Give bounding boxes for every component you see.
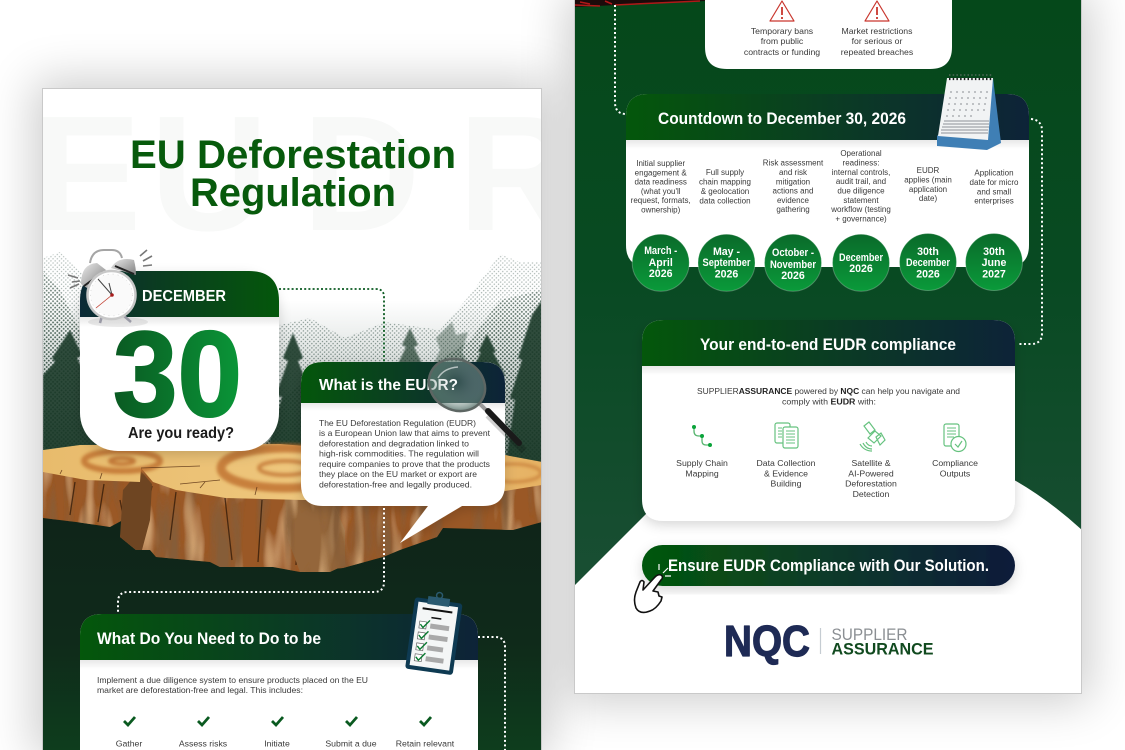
panel intro text <box>98 677 368 694</box>
timeline date circles: 2026 <box>916 268 940 280</box>
penalty text: restrictions: repeated breaches <box>841 47 914 57</box>
timeline descriptions: audit trail, and <box>836 177 886 186</box>
timeline descriptions: Operational <box>840 149 882 158</box>
checklist items: Gather <box>116 738 142 748</box>
main title: EU Deforestation <box>130 133 456 177</box>
icon: supply chain route <box>692 425 712 447</box>
main title: Regulation <box>190 171 396 215</box>
ghost lettering EUDR: D <box>302 82 420 265</box>
panel body text <box>319 418 491 490</box>
timeline descriptions: mitigation <box>776 178 810 186</box>
service labels: Detection <box>853 489 890 499</box>
panel: countdown <box>626 94 1029 291</box>
logo: NQC supplier assurance: SUPPLIER <box>832 625 908 644</box>
timeline descriptions: applies (main <box>904 176 952 184</box>
icon: documents <box>775 423 798 448</box>
timeline date circles: April <box>649 257 673 269</box>
big date number: 30 <box>113 306 242 442</box>
service labels: Supply Chain <box>676 458 728 468</box>
icon: desk calendar <box>937 75 1001 150</box>
checklist items <box>116 717 455 748</box>
timeline date circles: 2027 <box>982 268 1006 280</box>
service labels: AI-Powered <box>848 468 894 478</box>
timeline descriptions: data collection <box>699 196 751 206</box>
calendar card <box>80 271 279 451</box>
timeline date circles: June <box>982 257 1006 269</box>
timeline descriptions: (what you'll <box>641 187 681 196</box>
timeline date circles <box>632 234 1022 291</box>
service labels: Compliance <box>932 458 978 468</box>
panel header <box>642 320 1015 366</box>
checklist items: Submit a due <box>325 738 377 748</box>
dotted connector: requirements onward <box>478 637 505 750</box>
icon: warning triangle <box>865 1 889 21</box>
icon: pointing hand <box>634 564 671 612</box>
timeline date circles: November <box>770 259 816 271</box>
timeline date circles: October - <box>772 247 814 259</box>
icon: magnifying glass <box>428 358 526 453</box>
green background <box>575 0 1082 600</box>
panel body text: The EU Deforestation Regulation (EUDR) <box>319 418 476 428</box>
icon: warning triangle <box>770 1 794 21</box>
icon: satellite <box>860 422 885 451</box>
service labels: Data Collection <box>757 458 816 468</box>
left page <box>32 82 576 750</box>
timeline descriptions: + governance) <box>835 214 887 224</box>
timeline descriptions: evidence <box>777 196 810 205</box>
penalty text: bans <box>744 26 820 57</box>
panel: what is the EUDR <box>301 362 505 543</box>
dotted connector: into countdown <box>615 5 626 114</box>
tree stump <box>43 444 542 572</box>
service labels: Building <box>771 478 802 488</box>
timeline descriptions: Application <box>974 168 1014 178</box>
timeline date circles: May - <box>713 246 741 258</box>
dotted connector: calendar to card <box>279 289 384 362</box>
checklist items: Assess risks <box>179 738 228 748</box>
timeline descriptions: Risk assessment <box>763 158 824 168</box>
panel heading: What Do You Need to Do to be <box>97 630 321 648</box>
timeline date circles: 30th <box>983 246 1005 258</box>
panel: end-to-end compliance <box>642 320 1015 521</box>
penalty text: bans: Temporary bans <box>751 26 814 36</box>
timeline descriptions: workflow (testing <box>830 205 891 214</box>
timeline date circles: 2026 <box>849 263 873 275</box>
panel header <box>80 614 478 660</box>
dotted connector: card to requirements <box>118 508 384 614</box>
month label: DECEMBER <box>142 288 226 305</box>
timeline descriptions: request, formats, <box>631 196 691 205</box>
timeline descriptions: gathering <box>776 205 810 214</box>
call to action button <box>642 545 1015 586</box>
timeline descriptions: date for micro <box>970 178 1019 187</box>
timeline descriptions: readiness: <box>843 158 879 168</box>
icon: clipboard <box>405 589 464 675</box>
timeline descriptions: Full supply <box>706 168 744 177</box>
panel body text: deforestation-free and legally produced. <box>319 480 472 490</box>
service labels: Outputs <box>940 468 971 478</box>
ghost lettering EUDR: R <box>458 82 576 265</box>
dotted connector: countdown to compliance <box>1017 119 1042 344</box>
panel header <box>626 94 1029 140</box>
penalty text: restrictions <box>841 26 914 57</box>
icon: alarm clock <box>68 250 152 327</box>
panel: what do you need to do <box>80 614 478 750</box>
logo: NQC supplier assurance: NQC <box>724 617 810 666</box>
timeline descriptions: application <box>909 185 947 194</box>
halftone forest background <box>43 252 541 462</box>
checklist items: Retain relevant <box>396 738 455 748</box>
timeline descriptions: EUDR <box>917 166 940 175</box>
timeline date circles: 2026 <box>715 268 738 280</box>
ghost lettering EUDR <box>32 82 576 265</box>
timeline descriptions: actions and <box>773 186 813 196</box>
timeline descriptions: ownership) <box>641 206 681 214</box>
calendar header <box>80 271 279 317</box>
timeline date circles: 30th <box>917 246 939 258</box>
icon: compliance document <box>944 424 966 452</box>
timeline descriptions: chain mapping <box>699 178 751 186</box>
logo: NQC supplier assurance <box>724 617 934 666</box>
timeline descriptions: enterprises <box>974 196 1014 206</box>
checklist items: Initiate <box>264 738 290 748</box>
timeline descriptions: Initial supplier <box>636 159 685 168</box>
timeline descriptions: statement <box>843 196 879 205</box>
intro text: comply with EUDR with: <box>782 396 876 406</box>
panel intro text: Implement a due diligence system to ensure products placed on the EU <box>97 675 368 685</box>
panel body text: is a European Union law that aims to prevent <box>319 428 491 438</box>
timeline descriptions: engagement & <box>635 168 687 178</box>
intro text <box>697 386 960 406</box>
timeline date circles: 2026 <box>649 268 673 280</box>
penalty text: restrictions: for serious or <box>852 36 902 46</box>
logo: NQC supplier assurance: ASSURANCE <box>832 640 934 658</box>
intro text: SUPPLIERASSURANCE powered by NQC can help you navigate and <box>697 386 960 396</box>
panel heading: Your end-to-end EUDR compliance <box>700 336 956 354</box>
service labels: Deforestation <box>845 478 897 488</box>
white footer shape <box>575 480 1081 600</box>
service labels: & Evidence <box>764 468 808 478</box>
service labels: Mapping <box>685 468 719 478</box>
panel: penalties <box>705 0 952 69</box>
dark ground <box>43 510 542 750</box>
timeline date circles: December <box>839 252 883 264</box>
right page <box>574 0 1082 694</box>
timeline date circles: September <box>702 257 750 269</box>
ghost lettering EUDR: U <box>150 82 268 265</box>
panel header <box>301 362 505 403</box>
timeline descriptions: and risk <box>779 168 808 177</box>
service labels <box>676 458 978 499</box>
timeline descriptions: due diligence <box>837 186 885 196</box>
panel body text: require companies to prove that the products <box>319 459 491 469</box>
panel body text: they place on the EU market or export are <box>319 469 477 479</box>
ghost lettering EUDR: E <box>32 82 141 265</box>
are you ready: Are you ready? <box>128 425 234 442</box>
timeline date circles: 2026 <box>781 270 805 282</box>
penalty text: bans: contracts or funding <box>744 47 820 57</box>
panel body text: high-risk commodities. The regulation will <box>319 448 479 458</box>
penalty text: restrictions: Market restrictions <box>842 26 913 36</box>
timeline descriptions: & geolocation <box>701 187 749 196</box>
timeline descriptions: date) <box>919 194 937 203</box>
service labels: Satellite & <box>851 458 891 468</box>
call to action button: Ensure EUDR Compliance with Our Solution. <box>668 557 989 575</box>
panel heading: Countdown to December 30, 2026 <box>658 110 906 128</box>
penalty text: bans: from public <box>761 36 804 46</box>
timeline descriptions: internal controls, <box>832 168 890 177</box>
caution tape strip <box>575 0 705 7</box>
timeline descriptions: data readiness <box>634 178 687 186</box>
panel intro text: market are deforestation-free and legal. This includes: <box>97 685 303 695</box>
panel heading: What is the EUDR? <box>319 377 458 394</box>
timeline date circles: March - <box>644 245 678 257</box>
timeline descriptions <box>631 149 1019 224</box>
panel body text: deforestation and degradation linked to <box>319 438 469 448</box>
timeline descriptions: and small <box>977 188 1011 196</box>
timeline date circles: December <box>906 257 950 269</box>
main title <box>130 133 456 215</box>
